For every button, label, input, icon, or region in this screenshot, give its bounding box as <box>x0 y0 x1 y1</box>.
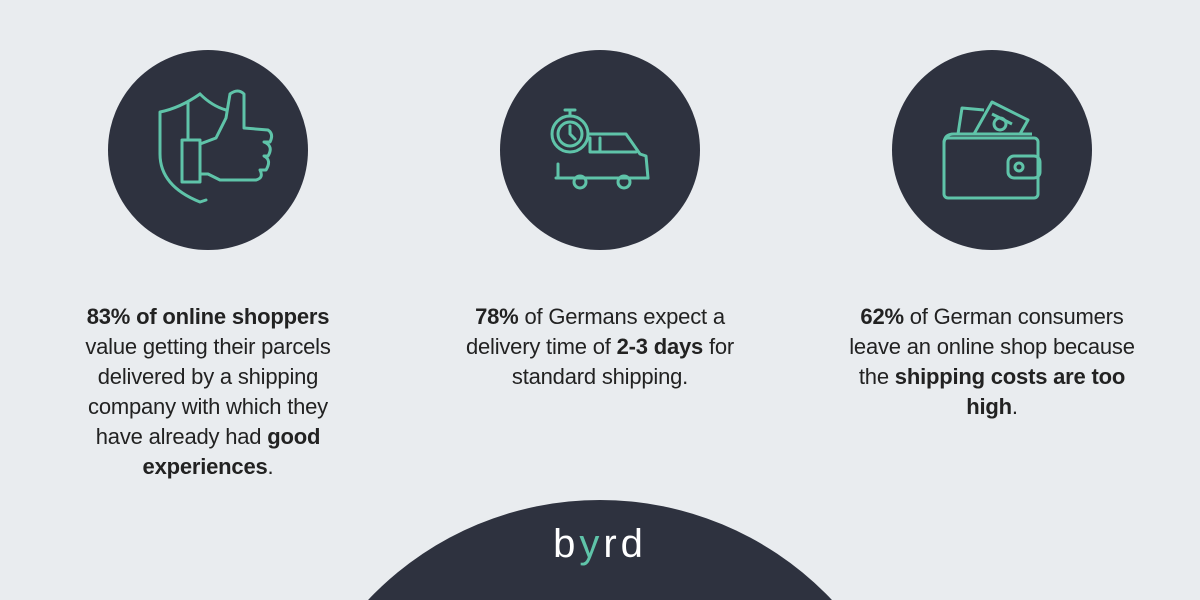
icon circle: delivery van with stopwatch <box>500 50 700 250</box>
text: stat 2: 78% of Germans expect a delivery time of 2-3 days for standard shipping. <box>466 304 734 389</box>
icon circle: shield thumbs up <box>108 50 308 250</box>
icon circle: wallet with cash <box>892 50 1092 250</box>
text: stat 3: 62% of German consumers leave an online shop because the shipping costs are too high. <box>849 304 1135 419</box>
text: stat 1: 83% of online shoppers value getting their parcels delivered by a shipping company with which they have already had good experiences. <box>85 304 331 479</box>
logo: byrd: byrd <box>553 522 647 566</box>
